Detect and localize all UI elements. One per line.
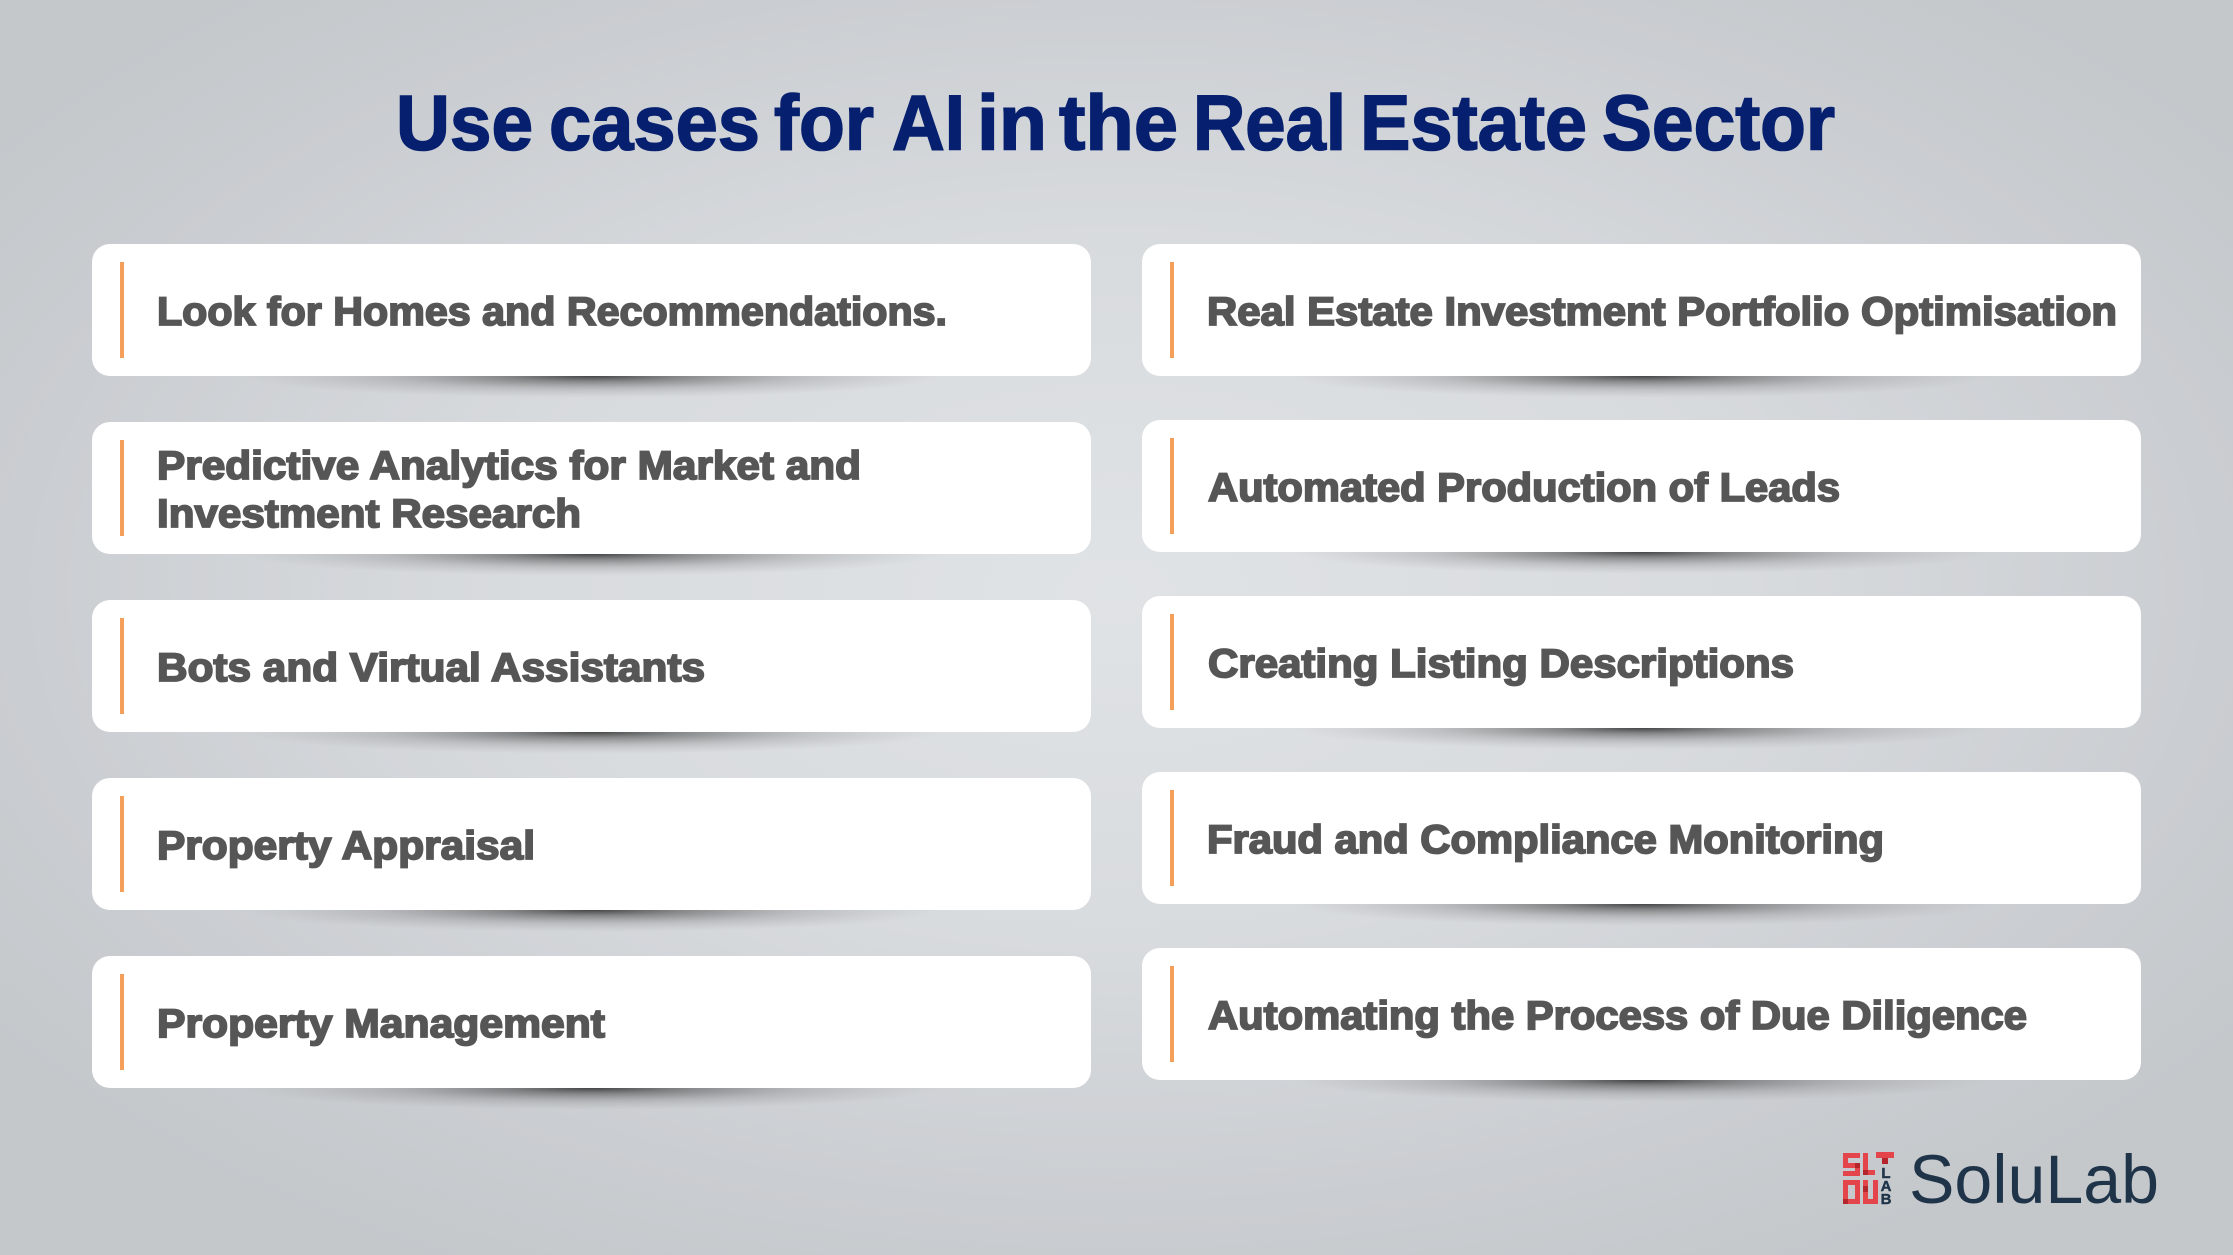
card: Property Management: Property Management [157,1002,605,1046]
panel: left column [92,244,1091,1110]
title: Use [396,78,533,166]
icon: SoluLab mark [1843,1152,1894,1208]
card: Property Appraisal [92,778,1091,932]
title: the [1059,78,1178,166]
title: Real [1193,78,1346,166]
card: Automating Due Diligence [1142,948,2141,1102]
card: Fraud and Compliance Monitoring [1142,772,2141,926]
card: Portfolio Optimisation [1142,244,2141,398]
title: AI [892,78,965,166]
card: Look for Homes [92,244,1091,398]
card: Fraud and Compliance Monitoring: Fraud and Compliance Monitoring [1207,818,1884,862]
card: Predictive Analytics: Predictive Analytics for Market and [157,444,861,488]
title [396,78,1835,166]
icon: SoluLab mark: A [1881,1178,1892,1195]
title: in [977,78,1047,166]
icon: SoluLab mark: B [1881,1191,1892,1208]
card: Automated Production of Leads: Automated Production of Leads [1208,466,1840,510]
card: Creating Listing Descriptions [1142,596,2141,750]
card: Automated Production of Leads [1142,420,2141,574]
icon: SoluLab mark: L [1881,1165,1891,1182]
card: Bots and Virtual Assistants [92,600,1091,754]
title: for [774,78,874,166]
title: Sector [1602,78,1835,166]
card: Creating Listing Descriptions: Creating Listing Descriptions [1208,642,1794,686]
card: Portfolio Optimisation: Real Estate Investment Portfolio Optimisation [1207,290,2117,334]
card: Predictive Analytics: Investment Research [157,492,581,536]
title: Estate [1360,78,1587,166]
card: Property Appraisal: Property Appraisal [157,824,535,868]
card: Look for Homes: Look for Homes and Recommendations. [157,290,947,334]
panel: right column [1142,244,2141,1102]
card: Predictive Analytics [92,422,1091,576]
card: Bots and Virtual Assistants: Bots and Virtual Assistants [157,646,705,690]
logo: SoluLab [1843,1141,2159,1218]
card: Property Management [92,956,1091,1110]
title: cases [549,78,760,166]
wordmark: SoluLab [1909,1141,2159,1218]
card: Automating Due Diligence: Automating the Process of Due Diligence [1208,994,2027,1038]
